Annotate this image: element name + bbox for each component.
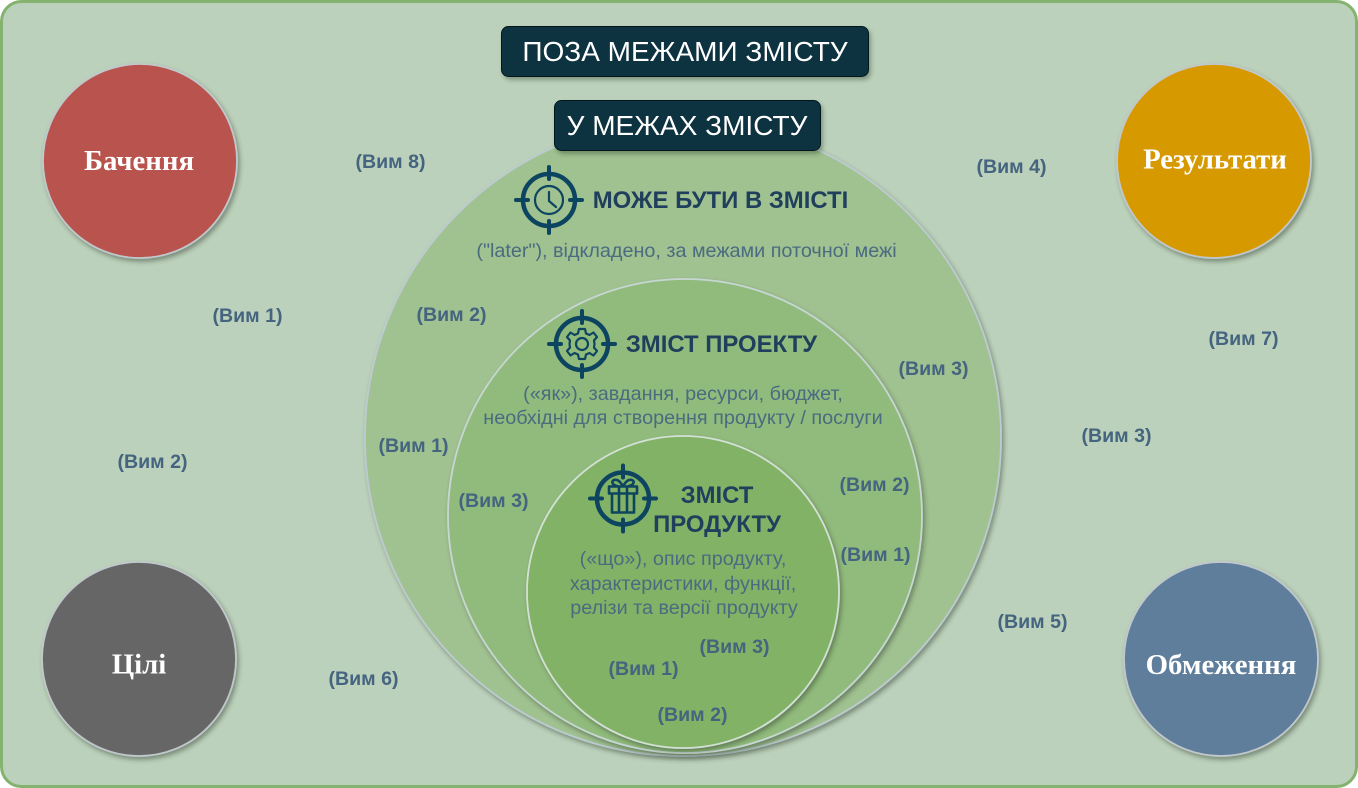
requirement labels: (Вим 2) bbox=[117, 451, 188, 473]
requirement labels: (Вим 5) bbox=[997, 611, 1068, 633]
inner circle: product scope bbox=[527, 436, 839, 748]
badge: in scope: У МЕЖАХ ЗМІСТУ bbox=[567, 110, 808, 141]
description: project scope: необхідні для створення продукту / послуги bbox=[483, 407, 883, 429]
requirement labels: (Вим 7) bbox=[1208, 328, 1279, 350]
requirement labels: (Вим 1) bbox=[212, 305, 283, 327]
heading: project scope: ЗМІСТ ПРОЕКТУ bbox=[626, 331, 818, 358]
middle circle: project scope bbox=[448, 279, 922, 753]
description: project scope: («як»), завдання, ресурси, бюджет, bbox=[523, 383, 843, 405]
circle: constraints: Обмеження bbox=[1146, 649, 1296, 681]
description: project scope bbox=[483, 383, 883, 429]
circle: results: Результати bbox=[1143, 144, 1287, 176]
icon: gift target bbox=[590, 466, 656, 532]
requirement labels: (Вим 6) bbox=[328, 668, 399, 690]
icon: gear target bbox=[549, 311, 615, 377]
circle: vision bbox=[43, 64, 237, 258]
requirement labels: (Вим 1) bbox=[840, 544, 911, 566]
requirement labels: (Вим 3) bbox=[1081, 425, 1152, 447]
circle: results bbox=[1117, 64, 1311, 258]
requirement labels: (Вим 8) bbox=[355, 151, 426, 173]
requirement labels: (Вим 2) bbox=[416, 304, 487, 326]
requirement labels: (Вим 3) bbox=[898, 358, 969, 380]
requirement labels: (Вим 2) bbox=[657, 704, 728, 726]
heading: product scope bbox=[653, 482, 782, 538]
requirement labels: (Вим 4) bbox=[976, 156, 1047, 178]
requirement labels bbox=[117, 151, 1279, 726]
heading: product scope: ЗМІСТ bbox=[681, 482, 754, 509]
requirement labels: (Вим 3) bbox=[699, 636, 770, 658]
badge: out of scope bbox=[502, 26, 868, 76]
requirement labels: (Вим 1) bbox=[378, 435, 449, 457]
circle: goals: Цілі bbox=[112, 648, 166, 680]
badge: out of scope: ПОЗА МЕЖАМИ ЗМІСТУ bbox=[522, 36, 848, 67]
requirement labels: (Вим 3) bbox=[458, 490, 529, 512]
circle: constraints bbox=[1124, 562, 1318, 756]
description: product scope: характеристики, функції, bbox=[570, 573, 796, 595]
description: later: ("later"), відкладено, за межами поточної межі bbox=[476, 240, 897, 262]
outer circle: may be in scope bbox=[365, 120, 1001, 756]
requirement labels: (Вим 2) bbox=[839, 474, 910, 496]
circle: vision: Бачення bbox=[84, 145, 194, 177]
badge: in scope bbox=[554, 100, 820, 150]
heading: may be in scope: МОЖЕ БУТИ В ЗМІСТІ bbox=[593, 187, 848, 214]
description: product scope: релізи та версії продукту bbox=[570, 597, 798, 619]
icon: clock target bbox=[516, 167, 582, 233]
circle: goals bbox=[42, 562, 236, 756]
requirement labels: (Вим 1) bbox=[608, 658, 679, 680]
description: product scope bbox=[570, 548, 798, 619]
description: product scope: («що»), опис продукту, bbox=[580, 548, 786, 570]
heading: product scope: ПРОДУКТУ bbox=[653, 511, 782, 538]
